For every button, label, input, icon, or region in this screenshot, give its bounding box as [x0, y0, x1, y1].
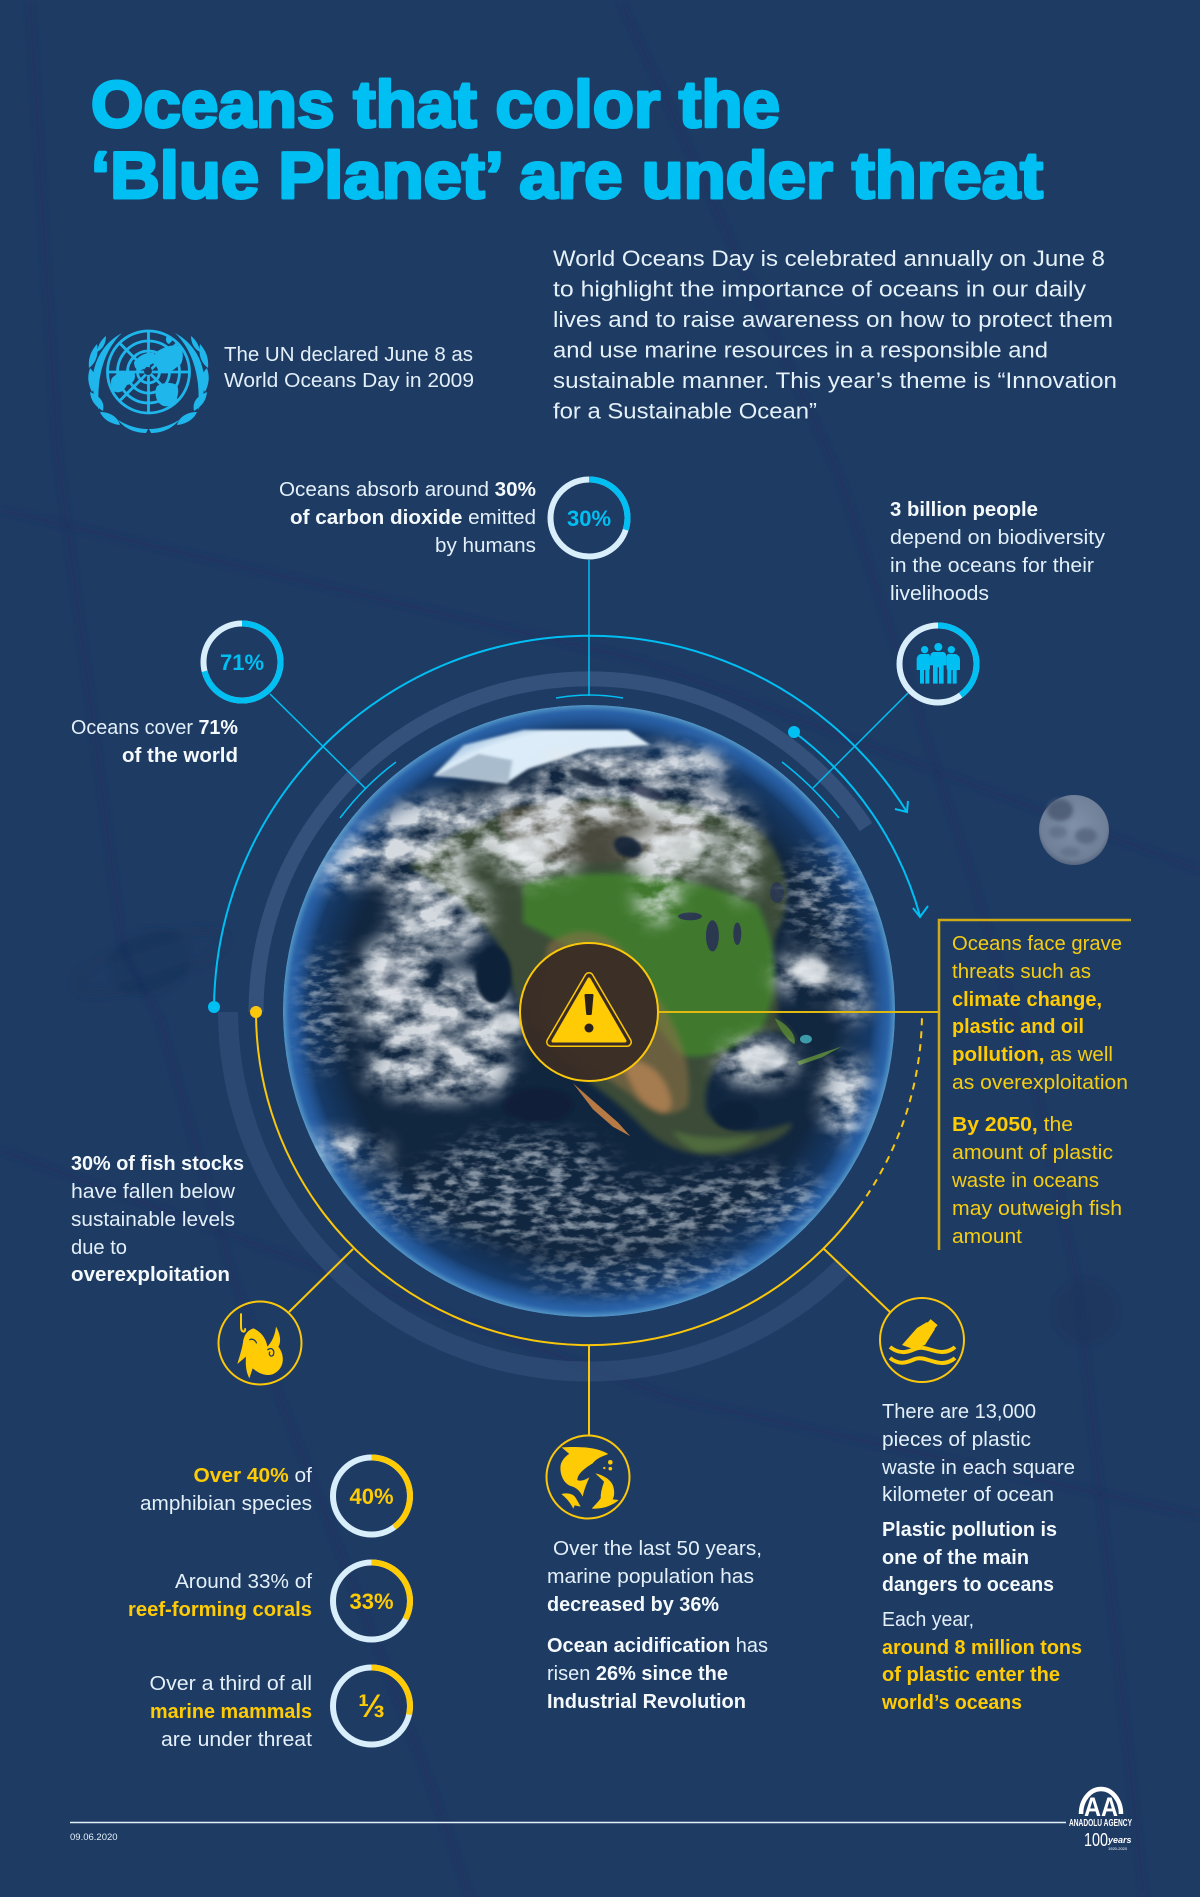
title: Oceans that color the	[91, 67, 780, 141]
text: marine mammals: Over a third of all	[150, 1673, 312, 1695]
text: three billion people	[890, 499, 1105, 605]
text: carbon dioxide	[279, 479, 536, 557]
text: three billion people: in the oceans for their	[890, 555, 1094, 577]
orbit rings	[228, 679, 866, 1371]
intro paragraph: to highlight the importance of oceans in our daily	[553, 276, 1086, 302]
logo: Anadolu Agency: AA	[1084, 1792, 1118, 1822]
text: plastic pollution	[881, 1401, 1082, 1714]
callout: threats: Oceans face grave	[952, 933, 1122, 955]
callout: threats: threats such as	[952, 961, 1091, 983]
icon: dolphins	[546, 1436, 630, 1518]
text: plastic pollution: of plastic enter the	[882, 1664, 1060, 1686]
text: marine population: Over the last 50 years,	[553, 1538, 762, 1560]
text: three billion people: livelihoods	[890, 583, 989, 605]
ring: 33 percent	[333, 1562, 410, 1640]
ring: 40 percent	[333, 1458, 410, 1534]
text: plastic pollution: waste in each square	[881, 1457, 1075, 1479]
blue orbit arcs with arrows	[209, 636, 928, 1012]
text: fish stocks	[71, 1153, 244, 1286]
text: plastic pollution: Each year,	[882, 1609, 974, 1631]
callout: threats: By 2050, the	[952, 1114, 1073, 1136]
globe	[283, 705, 895, 1317]
callout: threats: amount of plastic	[952, 1142, 1113, 1164]
title	[91, 67, 1043, 212]
UN declaration text: World Oceans Day in 2009	[224, 370, 474, 392]
text: plastic pollution: There are 13,000	[882, 1401, 1036, 1423]
text: carbon dioxide: by humans	[435, 535, 536, 557]
Greenland ice	[434, 730, 650, 784]
icon: warning triangle	[551, 977, 627, 1042]
text: oceans cover: Oceans cover 71%	[71, 717, 238, 739]
callout: threats: amount	[952, 1226, 1022, 1248]
yellow threat arc	[251, 1007, 922, 1436]
text: marine population: marine population has	[547, 1566, 754, 1588]
callout: threats: as overexploitation	[952, 1072, 1128, 1094]
callout: threats: pollution, as well	[952, 1044, 1113, 1066]
logo: Anadolu Agency	[1069, 1789, 1132, 1851]
text: plastic pollution: Plastic pollution is	[882, 1519, 1057, 1541]
callout: threats: waste in oceans	[951, 1170, 1099, 1192]
speckled ocean clouds	[300, 845, 877, 1292]
text: oceans cover	[71, 717, 238, 767]
ring: one third	[333, 1668, 410, 1744]
icon: plastic bottle in water	[880, 1298, 964, 1382]
intro paragraph: lives and to raise awareness on how to protect them	[553, 307, 1113, 332]
text: fish stocks: 30% of fish stocks	[71, 1153, 244, 1175]
text: amphibians: amphibian species	[140, 1493, 312, 1515]
intro paragraph: World Oceans Day is celebrated annually on June 8	[553, 246, 1105, 271]
moon	[1039, 795, 1109, 865]
text: fish stocks: overexploitation	[71, 1264, 230, 1286]
land: North America	[409, 797, 796, 1155]
ring: 40 percent: 40%	[349, 1484, 394, 1509]
ring: 71 percent	[204, 624, 280, 700]
icon: UN emblem	[88, 331, 209, 433]
blue connectors	[270, 560, 908, 818]
intro paragraph: sustainable manner. This year’s theme is “Innovation	[553, 368, 1117, 393]
text: plastic pollution: kilometer of ocean	[882, 1484, 1054, 1506]
text: fish stocks: sustainable levels	[71, 1209, 235, 1231]
text: carbon dioxide: of carbon dioxide emitted	[290, 507, 536, 529]
footer line and date: 09.06.2020	[70, 1832, 118, 1843]
ring: 30 percent: 30%	[567, 506, 611, 531]
intro paragraph	[553, 246, 1117, 424]
logo: Anadolu Agency: years	[1107, 1835, 1132, 1845]
text: marine population: risen 26% since the	[547, 1663, 728, 1685]
text: marine mammals	[150, 1673, 312, 1751]
warning circle	[520, 943, 939, 1081]
text: three billion people: depend on biodiversity	[890, 527, 1105, 549]
text: plastic pollution: pieces of plastic	[882, 1429, 1031, 1451]
text: fish stocks: have fallen below	[71, 1181, 236, 1203]
text: corals	[128, 1571, 312, 1621]
text: amphibians: Over 40% of	[194, 1465, 312, 1487]
title: ‘Blue Planet’ are under threat	[91, 138, 1043, 212]
icon: three people	[917, 643, 960, 684]
text: fish stocks: due to	[71, 1237, 127, 1259]
text: amphibians	[140, 1465, 312, 1515]
text: oceans cover: of the world	[122, 745, 238, 767]
text: marine mammals: are under threat	[161, 1729, 312, 1751]
logo: Anadolu Agency: 1920-2020	[1108, 1846, 1128, 1851]
text: marine mammals: marine mammals	[150, 1701, 312, 1723]
UN declaration text	[224, 344, 474, 392]
bright cloud cores and storm swirl	[372, 833, 828, 1072]
text: marine population: decreased by 36%	[547, 1594, 719, 1616]
ring: 30 percent	[550, 480, 628, 556]
intro paragraph: and use marine resources in a responsible and	[553, 338, 1048, 362]
main clouds	[290, 745, 872, 1172]
text: plastic pollution: one of the main	[882, 1547, 1029, 1569]
Baja California	[573, 1083, 630, 1136]
UN declaration text: The UN declared June 8 as	[224, 344, 473, 366]
text: marine population: Industrial Revolution	[547, 1691, 746, 1713]
intro paragraph: for a Sustainable Ocean”	[553, 398, 817, 424]
callout: threats: climate change,	[952, 989, 1102, 1011]
icon: shark and hook	[218, 1302, 302, 1384]
callout: threats: plastic and oil	[952, 1016, 1084, 1038]
callout: threats	[939, 920, 1131, 1250]
text: marine population: Ocean acidification has	[547, 1635, 768, 1657]
text: corals: reef-forming corals	[128, 1599, 312, 1621]
ring: one third: ⅓	[358, 1688, 385, 1724]
text: plastic pollution: dangers to oceans	[882, 1574, 1054, 1596]
logo: Anadolu Agency: ANADOLU AGENCY	[1069, 1818, 1132, 1829]
callout: threats: may outweigh fish	[952, 1198, 1122, 1220]
text: plastic pollution: around 8 million tons	[882, 1637, 1082, 1659]
ring: 71 percent: 71%	[220, 650, 264, 675]
text: marine population	[547, 1538, 768, 1713]
ring: people	[900, 626, 976, 702]
text: corals: Around 33% of	[175, 1571, 312, 1593]
text: carbon dioxide: Oceans absorb around 30%	[279, 479, 536, 501]
text: three billion people: 3 billion people	[890, 499, 1038, 521]
logo: Anadolu Agency: 100	[1084, 1830, 1108, 1850]
dark gaps	[476, 764, 756, 1130]
Florida and Caribbean	[775, 1018, 842, 1065]
Great Lakes	[678, 882, 784, 951]
ring: 33 percent: 33%	[349, 1589, 394, 1614]
text: plastic pollution: world’s oceans	[881, 1692, 1022, 1714]
